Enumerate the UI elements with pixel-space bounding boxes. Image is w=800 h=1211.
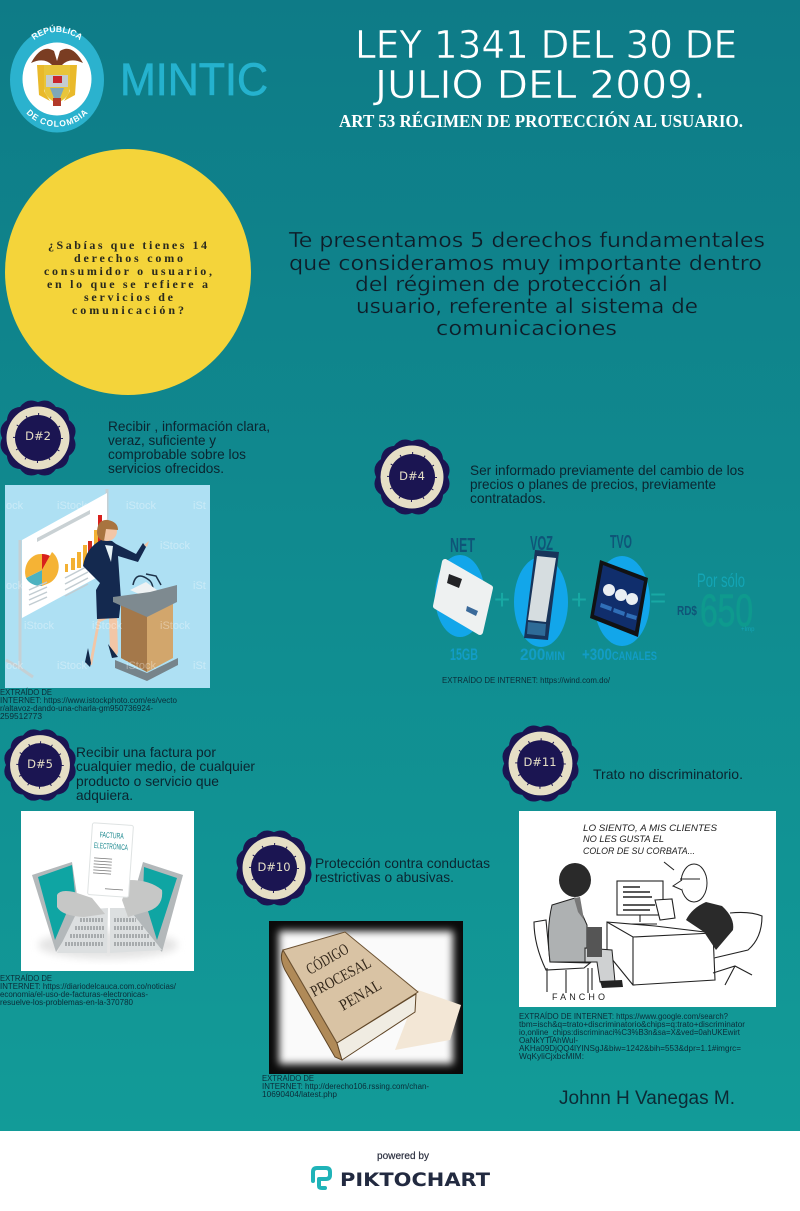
text: derecho 5: [76, 744, 255, 803]
image: discrimination cartoon: NO LES GUSTA EL: [583, 834, 664, 845]
caption: cartoon source: WqKyliCjxbcMIM:: [519, 1052, 584, 1061]
text: derecho 2: [108, 418, 270, 476]
caption: invoice source: economia/el-uso-de-facturas-electronicas-: [0, 990, 148, 999]
image: presenter at podium: iSt: [193, 500, 206, 512]
image: price plan graphic: NET: [450, 535, 475, 557]
image: price plan graphic: +: [571, 584, 587, 615]
text: derecho 10: Protección contra conductas: [315, 855, 490, 871]
caption: cartoon source: tbm=isch&q=trato+discriminatorio&chips=q:trato+discriminator: [519, 1020, 745, 1029]
image: presenter at podium: iStock: [24, 620, 54, 632]
image: price plan graphic: 200MIN: [520, 645, 565, 664]
text: derecho 5: producto o servicio que: [76, 773, 219, 789]
image: discrimination cartoon: COLOR DE SU CORBATA...: [583, 846, 695, 857]
image: penal code book: CÓDIGO: [302, 939, 352, 978]
text: derecho 5: cualquier medio, de cualquier: [76, 758, 255, 774]
image: discrimination cartoon: [519, 811, 776, 1007]
subtitle: ART 53 RÉGIMEN DE PROTECCIÓN AL USUARIO.: [339, 110, 743, 131]
image: price plan graphic: VOZ: [530, 533, 553, 555]
powered by: powered by: [377, 1151, 429, 1162]
image: presenter at podium: iStock: [126, 660, 156, 672]
caption: presenter source: r/altavoz-dando-una-charla-gm950736924-: [0, 704, 153, 713]
badge: D#2: [2, 402, 74, 474]
caption: invoice source: [0, 974, 177, 1007]
image: electronic invoice: ELECTRÓNICA: [94, 841, 129, 852]
caption: presenter source: INTERNET: https://www.istockphoto.com/es/vecto: [0, 696, 178, 705]
badge: D#11: [504, 727, 577, 800]
image: discrimination cartoon: FANCHO: [552, 992, 605, 1002]
image: price plan graphic: Por sólo: [697, 571, 745, 592]
image: presenter at podium: iStock: [92, 620, 122, 632]
intro text block: que consideramos muy importante dentro: [289, 251, 762, 275]
caption: presenter source: EXTRAÍDO DE: [0, 688, 52, 697]
text: derecho 4: contratados.: [470, 490, 546, 506]
caption: presenter source: [0, 688, 178, 721]
badge: D#10: [238, 832, 310, 904]
image: price plan graphic: TVO: [610, 532, 632, 552]
badge: D#5: [6, 731, 74, 799]
title: [355, 23, 737, 107]
caption: cartoon source: io,online_chips:discriminaci%C3%B3n&sa=X&ved=0ahUKEwirt: [519, 1028, 741, 1037]
text: derecho 11: Trato no discriminatorio.: [593, 766, 743, 782]
title: LEY 1341 DEL 30 DE: [355, 23, 737, 67]
text: derecho 2: veraz, suficiente y: [108, 432, 216, 448]
image: presenter at podium: [5, 485, 210, 688]
image: presenter at podium: ock: [6, 500, 24, 512]
image: discrimination cartoon: LO SIENTO, A MIS CLIENTES: [583, 823, 718, 834]
caption: cartoon source: EXTRAÍDO DE INTERNET: https://www.google.com/search?: [519, 1012, 729, 1021]
intro text block: comunicaciones: [436, 316, 617, 340]
callout: yellow circle question: consumidor o usuario,: [44, 264, 212, 278]
badge: D#5: D#5: [27, 757, 53, 771]
image: electronic invoice: FACTURA: [99, 830, 124, 841]
text: derecho 10: [315, 855, 490, 885]
image: presenter at podium: iStock: [57, 500, 87, 512]
image: price plan graphic: =: [650, 582, 666, 613]
callout: yellow circle question: en lo que se refiere a: [47, 277, 208, 291]
image: presenter at podium: iSt: [193, 580, 206, 592]
footer panel: [0, 1131, 800, 1211]
image: price plan graphic: RD$: [677, 603, 698, 618]
intro text block: [288, 228, 765, 340]
image: penal code book: [269, 921, 463, 1074]
caption: cartoon source: [519, 1012, 745, 1061]
badge: D#10: D#10: [257, 860, 291, 874]
badge: D#2: D#2: [25, 429, 51, 443]
image: presenter at podium: iStock: [160, 540, 190, 552]
caption: cartoon source: OaNkYTlAhWul-: [519, 1036, 578, 1045]
image: price plan graphic: +300CANALES: [582, 645, 657, 664]
router: [436, 562, 490, 632]
caption: price plan source: EXTRAÍDO DE INTERNET: https://wind.com.do/: [442, 676, 611, 685]
text: derecho 4: Ser informado previamente del cambio de los: [470, 462, 744, 478]
text: derecho 2: comprobable sobre los: [108, 446, 246, 462]
callout: yellow circle question: comunicación?: [72, 303, 184, 317]
image: presenter at podium: ock: [6, 580, 24, 592]
text: derecho 4: precios o planes de precios, previamente: [470, 476, 716, 492]
text: derecho 4: [470, 462, 744, 506]
intro text block: del régimen de protección al: [355, 272, 668, 296]
phone: [524, 550, 559, 640]
image: price plan graphic: [435, 532, 755, 664]
text: derecho 5: adquiera.: [76, 787, 133, 803]
text: derecho 2: Recibir , información clara,: [108, 418, 270, 434]
image: penal code book: PROCESAL: [308, 955, 374, 1001]
logo: Republica de Colombia seal: DE COLOMBIA: [26, 109, 88, 127]
image: price plan graphic: +: [494, 584, 510, 615]
image: presenter at podium: ock: [6, 660, 24, 672]
callout: yellow circle question: servicios de: [84, 290, 174, 304]
image: presenter at podium: iStock: [57, 660, 87, 672]
caption: invoice source: INTERNET: https://diariodelcauca.com.co/noticias/: [0, 982, 177, 991]
image: presenter at podium: iSt: [193, 660, 206, 672]
badge: D#4: [376, 441, 448, 513]
text: derecho 5: Recibir una factura por: [76, 744, 216, 760]
callout: yellow circle question: derechos como: [74, 251, 183, 265]
image: electronic invoice: [21, 811, 194, 971]
logo wordmark: MINTIC: MINTIC: [120, 54, 268, 105]
image: price plan graphic: +Imp: [741, 627, 755, 633]
logo: Republica de Colombia seal: [10, 24, 104, 132]
logo: Republica de Colombia seal: REPÚBLICA: [31, 24, 82, 40]
piktochart wordmark: PIKTOCHART: [340, 1169, 490, 1191]
text: derecho 10: restrictivas o abusivas.: [315, 869, 454, 885]
caption: book source: INTERNET: http://derecho106.rssing.com/chan-: [262, 1082, 429, 1091]
author: Johnn H Vanegas M.: [559, 1088, 735, 1109]
caption: invoice source: resuelve-los-problemas-en-la-370780: [0, 998, 134, 1007]
image: penal code book: PENAL: [336, 977, 385, 1014]
callout: yellow circle question: ¿Sabías que tienes 14: [48, 238, 207, 252]
icon: piktochart logo: [313, 1168, 330, 1188]
caption: book source: 10690404/latest.php: [262, 1090, 338, 1099]
callout: yellow circle question: [5, 149, 251, 395]
intro text block: Te presentamos 5 derechos fundamentales: [288, 228, 765, 252]
image: price plan graphic: 650: [700, 585, 753, 636]
badge: D#4: D#4: [399, 469, 425, 483]
image: presenter at podium: iStock: [126, 500, 156, 512]
caption: presenter source: 259512773: [0, 712, 43, 721]
title: JULIO DEL 2009.: [373, 63, 706, 107]
tablet: [590, 560, 648, 637]
caption: book source: [262, 1074, 429, 1099]
text: derecho 2: servicios ofrecidos.: [108, 460, 224, 476]
badge: D#11: D#11: [523, 755, 557, 769]
caption: cartoon source: AKHa09DjQQ4lYINSgJ&biw=1242&bih=553&dpr=1.1#imgrc=: [519, 1044, 741, 1053]
caption: book source: EXTRAÍDO DE: [262, 1074, 314, 1083]
image: presenter at podium: iStock: [160, 620, 190, 632]
image: price plan graphic: 15GB: [450, 645, 478, 664]
caption: invoice source: EXTRAÍDO DE: [0, 974, 52, 983]
intro text block: usuario, referente al sistema de: [356, 294, 698, 318]
